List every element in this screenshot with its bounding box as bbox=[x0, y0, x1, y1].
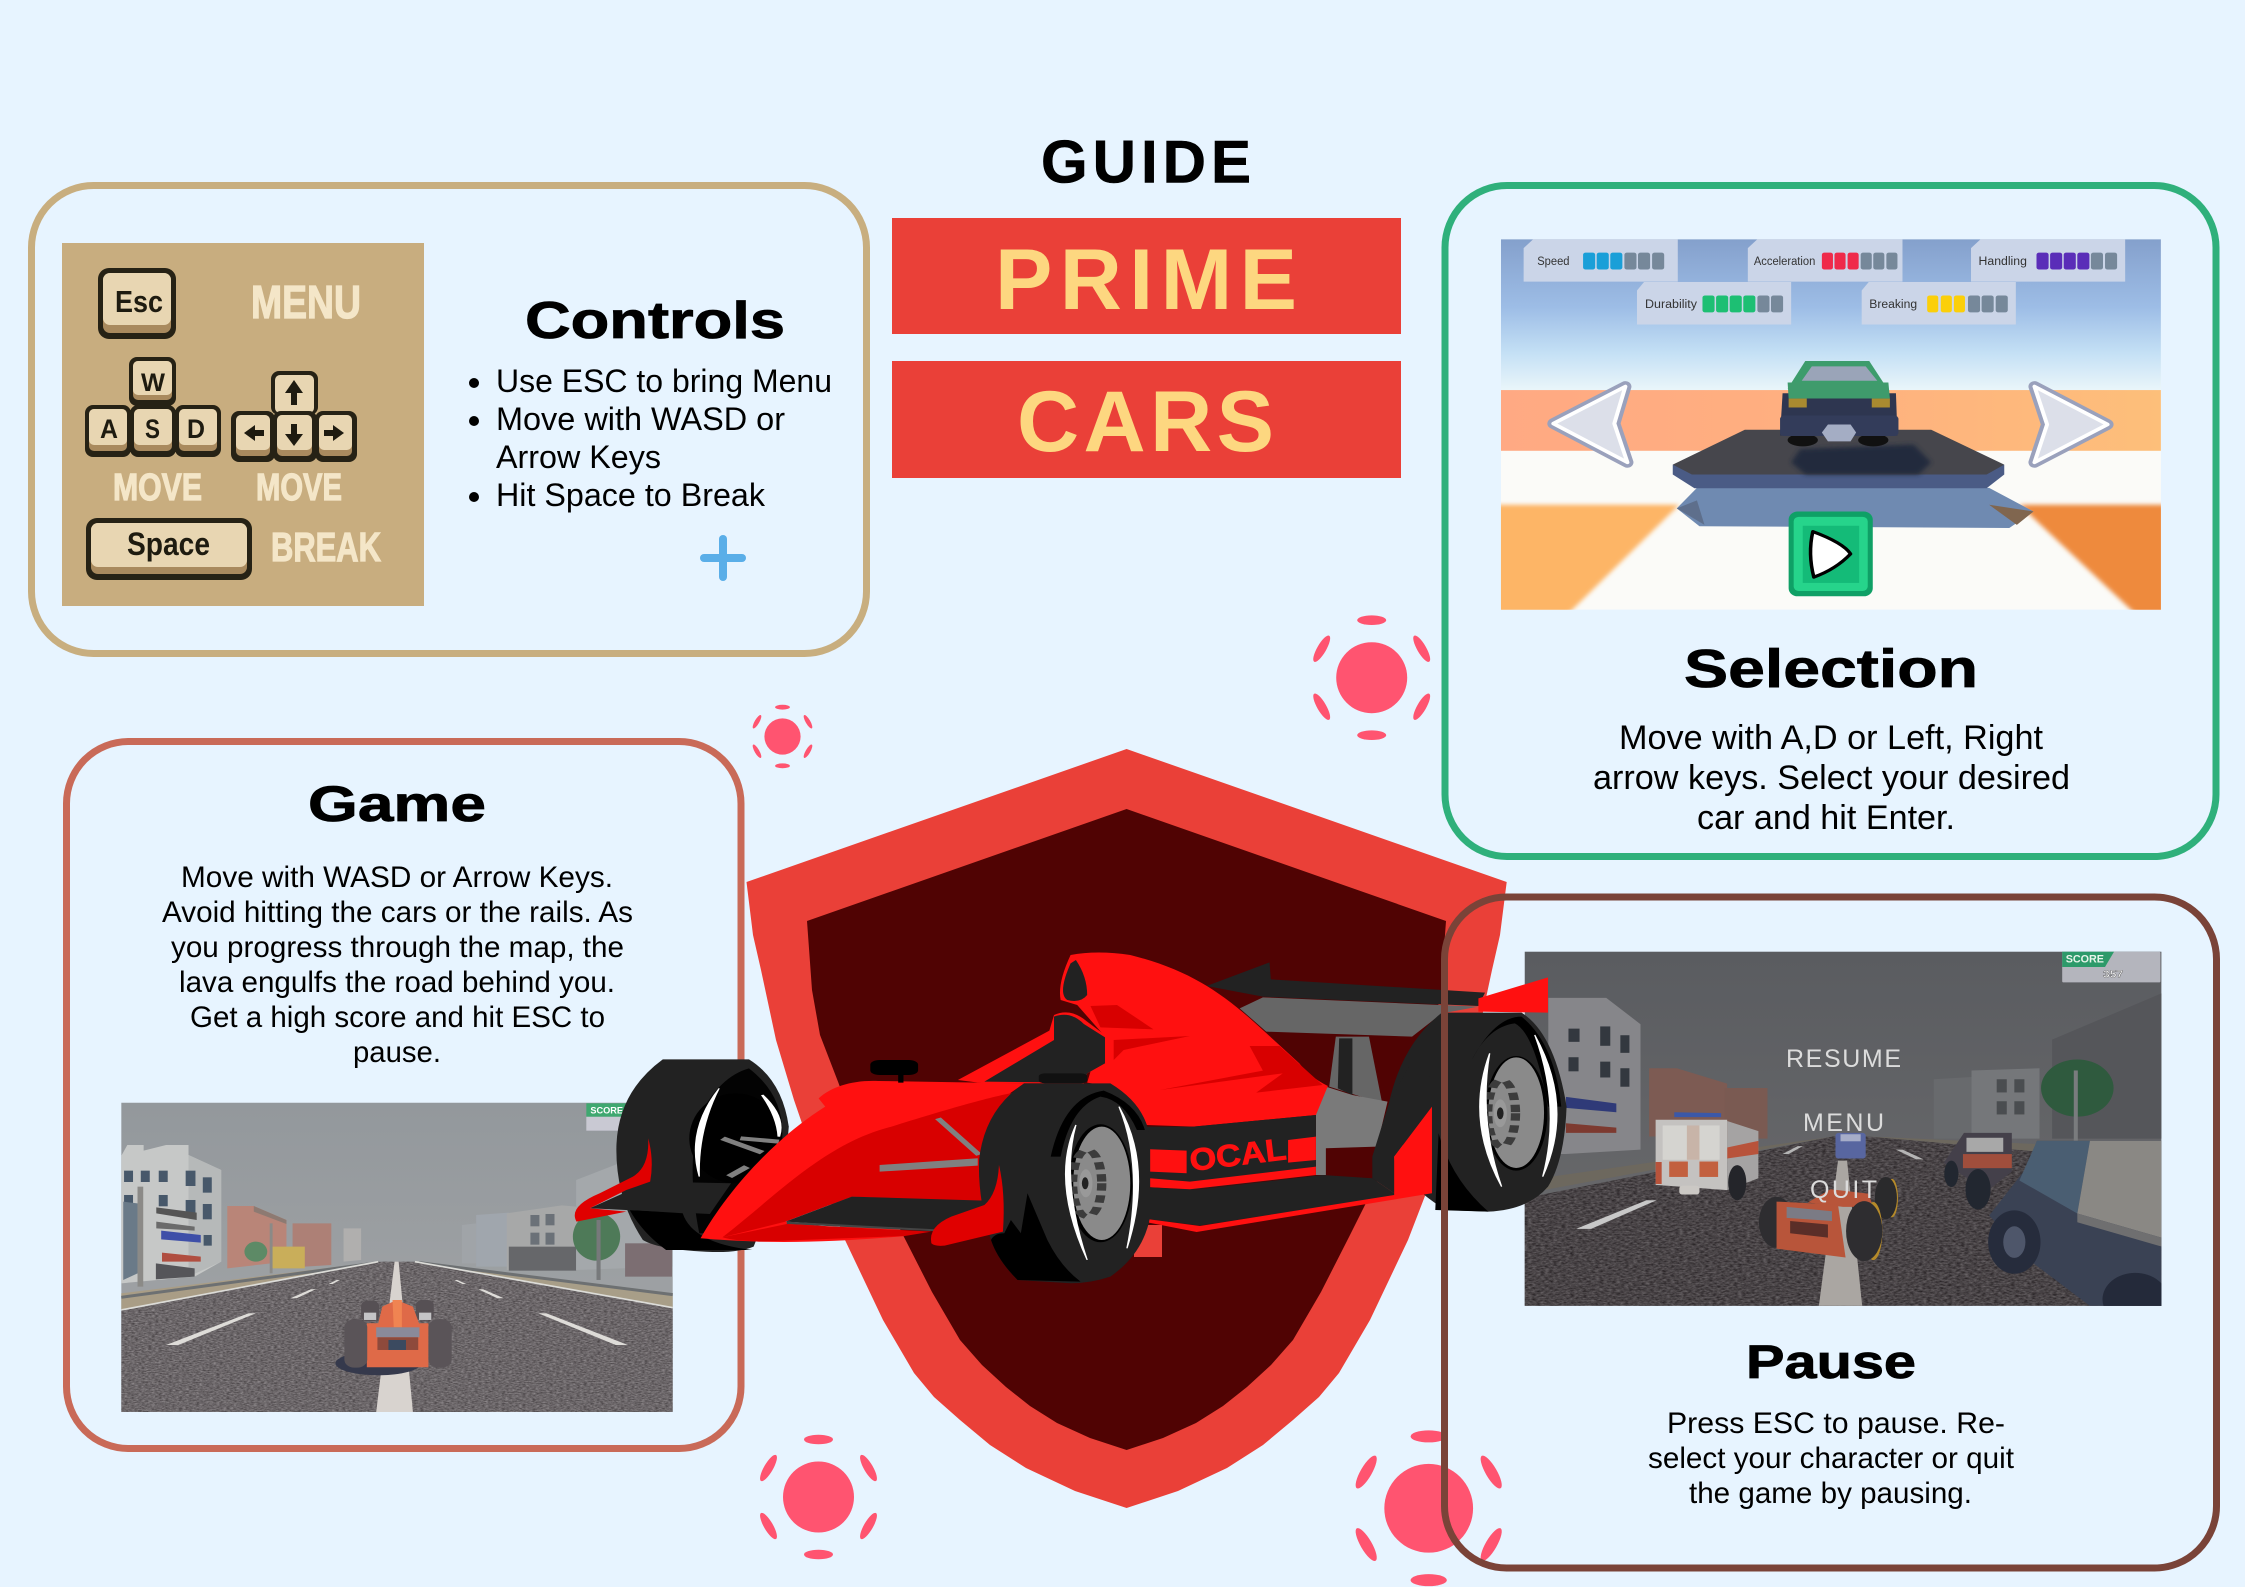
pickup truck bbox=[1944, 1133, 2012, 1210]
pause border bbox=[1444, 897, 2216, 1568]
controls bullet list: Hit Space to Break bbox=[496, 477, 766, 513]
controls bullet list: Arrow Keys bbox=[496, 439, 661, 475]
key: S: S bbox=[145, 414, 160, 444]
panel: controls bbox=[32, 186, 866, 654]
selection border bbox=[1445, 186, 2216, 856]
game heading: Game bbox=[308, 776, 486, 832]
game screenshot bbox=[121, 1103, 673, 1412]
panel: pause screenshot bbox=[1525, 952, 2168, 1326]
panel: selection bbox=[1445, 186, 2216, 856]
stat: handling: Handling bbox=[1979, 255, 2027, 268]
left endplate bbox=[575, 1138, 652, 1222]
game body text: Get a high score and hit ESC to bbox=[190, 1001, 605, 1034]
key: arrow left bbox=[231, 411, 275, 462]
nose bbox=[701, 1081, 1024, 1242]
decorative burst: right of controls bbox=[1310, 615, 1433, 740]
game border bbox=[66, 742, 741, 1448]
key: W bbox=[129, 357, 176, 406]
stat: speed: Speed bbox=[1537, 255, 1570, 268]
key: A bbox=[85, 405, 131, 457]
controls bullet list: Move with WASD or bbox=[496, 401, 785, 437]
player car bbox=[335, 1300, 452, 1375]
far blue car bbox=[1835, 1133, 1866, 1158]
header: guide title bbox=[892, 128, 1401, 478]
key: W: W bbox=[141, 369, 165, 397]
pause menu labels: RESUME bbox=[1786, 1045, 1901, 1073]
cars banner: CARS bbox=[1017, 374, 1274, 470]
pause body text: the game by pausing. bbox=[1689, 1477, 1972, 1510]
ambulance bbox=[1656, 1112, 1758, 1200]
game body text: lava engulfs the road behind you. bbox=[179, 966, 615, 999]
pause body text: select your character or quit bbox=[1648, 1442, 2015, 1475]
pause menu labels bbox=[1786, 1045, 1901, 1204]
decorative burst: bottom right bbox=[1352, 1430, 1505, 1586]
engine bay bbox=[1316, 1087, 1388, 1175]
decorative burst: small top of shield bbox=[751, 705, 814, 768]
pause body text: Press ESC to pause. Re- bbox=[1667, 1407, 2005, 1440]
arrow: next car bbox=[2034, 387, 2108, 462]
game body text: pause. bbox=[353, 1036, 441, 1069]
prime banner bbox=[892, 218, 1401, 334]
key label: menu: MENU bbox=[251, 276, 361, 328]
front wing left bbox=[590, 1182, 731, 1214]
decorative burst: bottom left bbox=[757, 1435, 880, 1559]
key: Esc: Esc bbox=[115, 284, 163, 319]
pause menu labels: MENU bbox=[1803, 1109, 1884, 1137]
stat: acceleration: Acceleration bbox=[1754, 255, 1815, 268]
panel: pause bbox=[1444, 897, 2216, 1568]
key: arrow right bbox=[315, 411, 357, 462]
selection heading: Selection bbox=[1684, 639, 1978, 699]
stat: durability: Durability bbox=[1645, 298, 1698, 311]
stat: breaking bbox=[1862, 282, 2016, 324]
arrow: previous car bbox=[1553, 387, 1627, 462]
selection body text bbox=[1593, 719, 2070, 837]
stat: durability bbox=[1637, 282, 1791, 324]
panel: game bbox=[66, 742, 741, 1448]
key: arrow down bbox=[273, 411, 317, 462]
game body text: Move with WASD or Arrow Keys. bbox=[181, 861, 613, 894]
mirror bbox=[870, 1060, 918, 1083]
controls bullet list: Use ESC to bring Menu bbox=[496, 363, 832, 399]
controls key diagram bbox=[62, 243, 424, 606]
pause body text bbox=[1648, 1407, 2015, 1510]
guide label: GUIDE bbox=[1041, 128, 1251, 196]
pause player car bbox=[1759, 1177, 1898, 1261]
stat: breaking: Breaking bbox=[1869, 298, 1917, 311]
rear left wheel bbox=[616, 1059, 789, 1252]
cockpit bbox=[958, 1012, 1107, 1083]
controls heading: Controls bbox=[525, 292, 785, 350]
prime banner: PRIME bbox=[995, 232, 1297, 328]
right rear wheel bbox=[1389, 1013, 1567, 1212]
pause road bbox=[1525, 1136, 2161, 1306]
icon: plus bbox=[704, 539, 742, 577]
sponsor text: OCAL bbox=[1188, 1131, 1288, 1178]
key: Space: Space bbox=[127, 526, 210, 562]
front right wheel bbox=[979, 1073, 1150, 1283]
turntable platform bbox=[1673, 430, 2004, 488]
stat: acceleration bbox=[1748, 239, 1902, 282]
nose struts bbox=[880, 1118, 979, 1172]
floor bbox=[1149, 1175, 1397, 1226]
game road bbox=[121, 1262, 673, 1412]
key label: move wasd: MOVE bbox=[113, 467, 202, 509]
pause heading: Pause bbox=[1746, 1335, 1916, 1388]
game body text bbox=[162, 861, 633, 1069]
race car illustration bbox=[575, 952, 1567, 1283]
pause score badge: 357 bbox=[2103, 969, 2123, 980]
key: A: A bbox=[100, 414, 118, 444]
key: D: D bbox=[187, 414, 205, 444]
pause menu labels: QUIT bbox=[1810, 1176, 1877, 1204]
pause score badge: SCORE bbox=[2066, 952, 2104, 965]
controls border bbox=[32, 186, 866, 654]
key label: break: BREAK bbox=[271, 524, 381, 570]
selection body text: arrow keys. Select your desired bbox=[1593, 759, 2070, 797]
sidepod bbox=[1147, 1115, 1316, 1190]
pause score badge bbox=[2062, 952, 2160, 982]
key: Space bbox=[86, 518, 252, 580]
key: Esc bbox=[98, 268, 176, 339]
right endplate bbox=[931, 1165, 1004, 1246]
key label: move arrows: MOVE bbox=[256, 467, 342, 509]
key: S bbox=[130, 405, 176, 457]
score badge bbox=[586, 1103, 631, 1131]
play button bbox=[1789, 511, 1873, 596]
stat: speed bbox=[1524, 239, 1678, 282]
large foreground car bbox=[1988, 1140, 2162, 1306]
shield emblem bbox=[746, 749, 1507, 1508]
game body text: you progress through the map, the bbox=[171, 931, 624, 964]
selection body text: Move with A,D or Left, Right bbox=[1619, 719, 2044, 757]
rear suspension black bbox=[1372, 1067, 1432, 1195]
selection screenshot bbox=[1490, 239, 2176, 621]
selection body text: car and hit Enter. bbox=[1697, 799, 1955, 837]
rear wing bbox=[1207, 962, 1548, 1103]
stat: handling bbox=[1971, 239, 2125, 282]
game body text: Avoid hitting the cars or the rails. As bbox=[162, 896, 633, 929]
green car bbox=[1780, 361, 1898, 446]
key: D bbox=[175, 405, 221, 457]
key: arrow up bbox=[271, 371, 318, 415]
controls bullet list bbox=[469, 363, 832, 513]
score badge: SCORE bbox=[590, 1106, 623, 1116]
cars banner bbox=[892, 361, 1401, 478]
engine cover bbox=[1060, 952, 1328, 1127]
